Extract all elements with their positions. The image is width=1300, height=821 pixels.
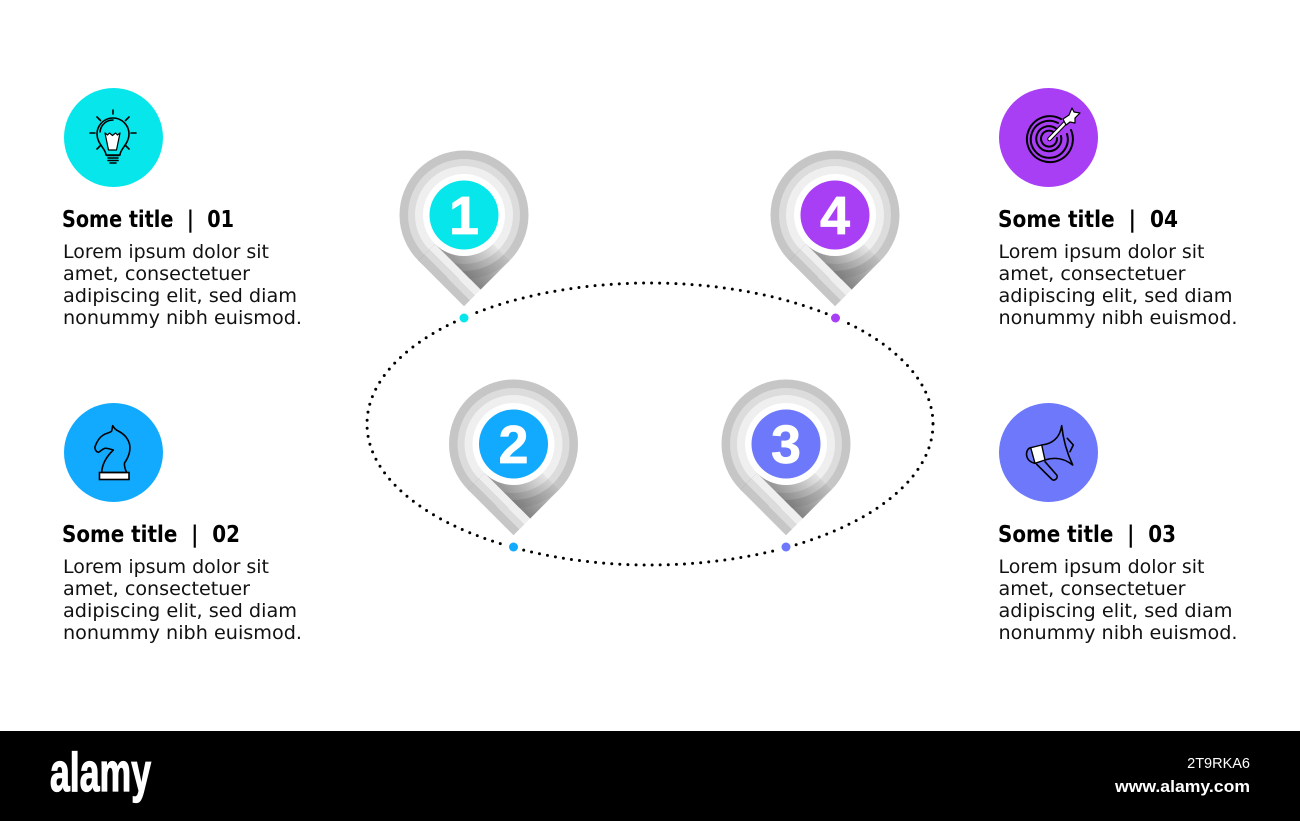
pin 1 number badge <box>430 180 498 250</box>
text block <box>63 557 302 644</box>
heading: Some title | 01 <box>62 207 234 233</box>
pin 2 number badge <box>479 410 548 478</box>
panel: item 02 <box>62 403 302 644</box>
text block <box>998 242 1238 329</box>
footer logo: alamy <box>50 741 151 803</box>
text block: nonummy nibh euismod. <box>998 308 1238 329</box>
pin 2 anchor dot <box>506 539 522 555</box>
pin 1 number badge: 1 <box>449 186 479 246</box>
text block <box>63 242 302 329</box>
pin 2 number badge: 2 <box>498 415 529 475</box>
pin 1 anchor dot <box>456 310 472 326</box>
text block: nonummy nibh euismod. <box>63 308 302 329</box>
pin 3 number badge <box>752 410 820 478</box>
pin 2 <box>449 380 578 535</box>
text block: amet, consectetuer <box>63 264 250 285</box>
text block: nonummy nibh euismod. <box>998 623 1238 644</box>
text block: Lorem ipsum dolor sit <box>63 242 269 263</box>
pin 4 anchor dot <box>828 310 844 326</box>
heading: Some title | 02 <box>62 522 240 548</box>
pin 3 anchor dot <box>778 539 794 555</box>
panel: item 03 <box>998 403 1238 644</box>
icon: chess knight <box>64 403 163 502</box>
text block: adipiscing elit, sed diam <box>998 601 1232 622</box>
image id: 2T9RKA6 <box>1187 756 1250 772</box>
text block: amet, consectetuer <box>63 579 250 600</box>
pin 4 number badge <box>800 180 870 250</box>
dotted ellipse path <box>367 283 933 565</box>
site url: www.alamy.com <box>1114 778 1250 796</box>
text block: Lorem ipsum dolor sit <box>63 557 269 578</box>
footer bar <box>0 731 1300 821</box>
text block: amet, consectetuer <box>998 264 1186 285</box>
text block: nonummy nibh euismod. <box>63 623 302 644</box>
text block: amet, consectetuer <box>998 579 1186 600</box>
heading: Some title | 03 <box>998 522 1176 548</box>
icon: megaphone <box>999 403 1098 502</box>
text block: adipiscing elit, sed diam <box>63 286 297 307</box>
pin 1 <box>400 150 528 306</box>
heading: Some title | 04 <box>998 207 1178 233</box>
pin 3 <box>722 380 850 535</box>
panel: item 01 <box>62 88 302 329</box>
pin 3 number badge: 3 <box>771 415 801 475</box>
icon: target with arrow <box>999 88 1098 187</box>
text block: Lorem ipsum dolor sit <box>998 557 1204 578</box>
pin 4 number badge: 4 <box>820 186 850 246</box>
text block <box>998 557 1238 644</box>
text block: Lorem ipsum dolor sit <box>998 242 1204 263</box>
panel: item 04 <box>998 88 1238 329</box>
icon: light bulb <box>64 88 163 187</box>
pin 4 <box>770 150 900 306</box>
text block: adipiscing elit, sed diam <box>998 286 1232 307</box>
text block: adipiscing elit, sed diam <box>63 601 297 622</box>
